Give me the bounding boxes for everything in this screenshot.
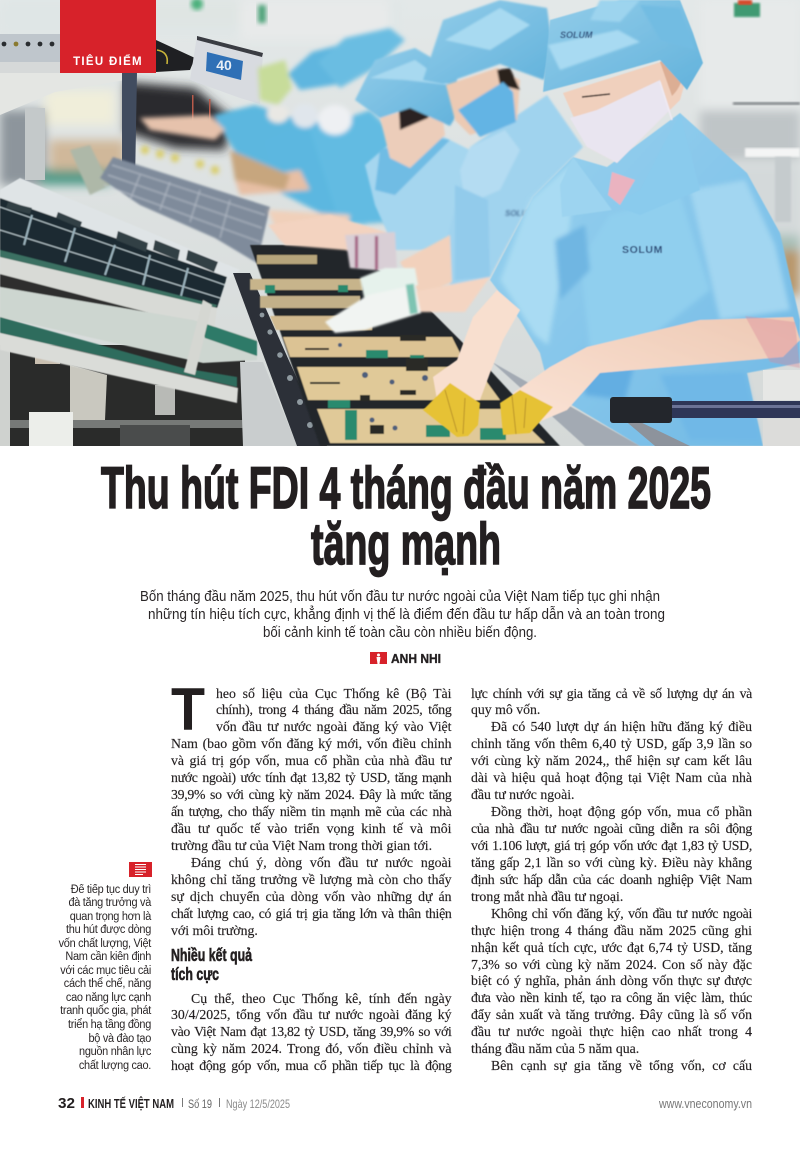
sidebar pull quote: vốn chất lượng, Việt [59, 938, 151, 950]
body column 1, upper text [170, 686, 452, 938]
third worker [268, 48, 470, 272]
body column 2: Đồng thời, hoạt động góp vốn, mua cổ phần [491, 804, 752, 819]
body column 2: đầu tư nước ngoài thực hiện cao nhất trong 4 [471, 1024, 752, 1039]
body column 1, upper text: Nam (bao gồm vốn đăng ký mới, vốn điều chỉnh [171, 736, 452, 751]
body column 1, upper text: chính), trong 4 tháng đầu năm 2025, tổng [216, 702, 452, 717]
foreground bar clamp [610, 370, 800, 446]
body column 1, upper text: heo số liệu của Cục Thống kê (Bộ Tài [216, 686, 452, 700]
collar [612, 113, 700, 215]
sidebar pull quote: tranh quốc gia, phát [60, 1005, 151, 1017]
section tag: TIÊU ĐIỂM [60, 0, 156, 73]
body column 1, upper text: nước ngoài) ước tính đạt 13,82 tỷ USD, tăng mạnh [171, 770, 452, 785]
sidebar pull quote [58, 884, 152, 1072]
body column 2: lực chính với sự gia tăng cả về số lượng dự án và [471, 686, 752, 700]
body column 2: Không chỉ vốn đăng ký, vốn đầu tư nước ngoài [491, 906, 752, 921]
sidebar pull quote: đà tăng trưởng và [68, 897, 151, 909]
lede paragraph: những tín hiệu tích cực, khẳng định vị thế là điểm đến đầu tư hấp dẫn và an toàn trong [148, 605, 665, 623]
subheading: Nhiều kết quả tích cực [170, 945, 252, 984]
yellow gloves [423, 383, 480, 437]
body column 1, lower text: Cụ thể, theo Cục Thống kê, tính đến ngày [191, 990, 452, 1006]
factory background [0, 0, 800, 446]
body column 2: Bên cạnh sự gia tăng về tổng vốn, cơ cấu [491, 1058, 752, 1073]
author byline [370, 651, 441, 666]
body column 2: tháng đầu năm của 5 năm qua. [471, 1041, 639, 1056]
sidebar pull quote: cách thể chế, năng [64, 978, 151, 990]
front tray [0, 178, 257, 403]
author byline: ANH NHI [391, 651, 441, 666]
body column 2: dài và hiệu quả hoạt động tại Việt Nam của nhà [471, 770, 752, 785]
body column 2: đẩy sản xuất và tăng trưởng. Đây cũng là số vốn [471, 1007, 752, 1022]
title [100, 456, 711, 578]
body column 2: tăng gấp 2,1 lần so với cùng kỳ. Điều này khẳng [471, 855, 752, 870]
body column 2: với 1.106 lượt, giá trị góp vốn ước đạt 1,83 tỷ USD, [471, 838, 752, 853]
body column 1, lower text: hoạt động góp vốn, mua cổ phần tiếp tục là động [171, 1058, 452, 1073]
lede paragraph: bối cảnh kinh tế toàn cầu còn nhiều biến động. [263, 624, 537, 641]
body column 1, upper text: vốn đầu tư nước ngoài đăng ký vào Việt [216, 719, 452, 734]
metal side rail [492, 362, 640, 446]
title: tăng mạnh [311, 512, 501, 577]
printed circuit boards [250, 245, 560, 446]
body column 2: của nhà đầu tư nước ngoài cũng diễn ra sôi động [471, 821, 752, 836]
sidebar pull quote: Để tiếp tục duy trì [71, 884, 151, 896]
body column 1, upper text: và giá trị góp vốn, mua cổ phần của nhà đầu tư [171, 753, 452, 768]
body column 1, upper text: 39,9% so với cùng kỳ năm 2024. Đây là mức tăng [171, 787, 452, 802]
body column 1, lower text: 30/4/2025, tổng vốn đầu tư nước ngoài đăng ký [171, 1007, 452, 1022]
second worker: SOLUM [505, 209, 534, 218]
pole [122, 73, 137, 182]
body column 2: với cùng kỳ năm 2024,, thể hiện sự cam kết lâu [471, 753, 752, 768]
white gloves [325, 268, 421, 333]
body column 1, upper text: với môi trường. [171, 923, 258, 938]
main worker [423, 0, 800, 446]
arms [513, 317, 800, 427]
body column 1, upper text: chất lượng cao, có giá trị gia tăng lớn và thân thiện [171, 906, 452, 921]
body column 1, lower text [170, 990, 452, 1074]
body column 1, upper text: không chỉ tăng trưởng về lượng mà còn cho thấy [171, 872, 452, 887]
body column 2: đầu tư nước ngoài. [471, 787, 574, 802]
sidebar pull quote: với các mục tiêu cải [60, 965, 151, 977]
body column 2: thực hiện trong 4 tháng đầu năm 2025 cũng ghi [471, 923, 752, 938]
conveyor belt rail [233, 273, 327, 446]
blurred distant workers [140, 28, 405, 245]
body column 1, lower text: cùng kỳ năm 2024. Trong đó, vốn điều chỉnh và [171, 1041, 452, 1056]
body column 2: nhận kết quả tích cực, ước đạt 6,74 tỷ USD, tăng [471, 940, 752, 955]
lede paragraph [140, 588, 665, 641]
sidebar pull quote: triển hạ tầng đồng [68, 1019, 151, 1031]
icon: red document [129, 862, 152, 877]
footer: page number and issue information: Số 19 [188, 1097, 212, 1111]
section tag: TIÊU ĐIỂM: TIÊU ĐIỂM [73, 56, 143, 68]
body column 1, lower text: vào Việt Nam đạt 13,82 tỷ USD, tăng 39,9% so với [171, 1024, 452, 1039]
dark lower machine area [0, 345, 245, 446]
main worker: SOLUM [560, 30, 593, 40]
body column 2: Đã có 540 lượt dự án hiện hữu đăng ký điều [491, 719, 752, 734]
body column 2: quy mô vốn. [471, 702, 540, 717]
subheading: Nhiều kết quả tích cực: tích cực [171, 964, 219, 984]
body column 2: định sức hấp dẫn của các doanh nghiệp Việt Nam [471, 872, 752, 887]
sidebar pull quote: bộ và đào tạo [88, 1033, 151, 1045]
second worker [400, 0, 583, 312]
face [563, 60, 688, 163]
body column 2: 7,3% so với cùng kỳ năm 2024. Con số này đặc [471, 956, 752, 972]
logo: SOLUM [622, 244, 663, 256]
body column 2: trong mắt nhà đầu tư ngoại. [471, 889, 623, 904]
sign with number 40 [190, 36, 263, 131]
body column 2: chỉnh tăng vốn thêm 6,40 tỷ USD, gấp 3,9 lần so [471, 736, 752, 751]
photo: factory workers on electronics assembly line [0, 0, 800, 446]
body column 1, upper text: sự dịch chuyển của dòng vốn vào những dự án [171, 889, 452, 904]
sidebar pull quote: cao năng lực cạnh [66, 992, 151, 1004]
hat [543, 0, 703, 92]
footer: page number and issue information [58, 1095, 290, 1112]
body column 2: biệt có ý nghĩa, phản ánh dòng vốn thực sự được [471, 973, 752, 988]
lede paragraph: Bốn tháng đầu năm 2025, thu hút vốn đầu tư nước ngoài của Việt Nam tiếp tục ghi nhận [140, 588, 660, 605]
footer: page number and issue information: 32 [58, 1095, 75, 1112]
sidebar pull quote: chất lượng cao. [79, 1060, 151, 1072]
back tray [70, 145, 270, 263]
body column 1, upper text: Đáng chú ý, dòng vốn đầu tư nước ngoài [191, 855, 452, 870]
sidebar pull quote: Nam cần kiên định [65, 951, 151, 963]
body column 1, upper text: ấn tượng, cho thấy niềm tin mạnh mẽ của các nhà [171, 804, 452, 819]
body column 1, upper text: đầu tư quốc tế vào triển vọng kinh tế và môi [171, 821, 452, 836]
footer: page number and issue information: KINH TẾ VIỆT NAM [88, 1096, 174, 1111]
shirt [490, 113, 800, 446]
body column 1, upper text: trường đầu tư của Việt Nam trong thời gian tới. [171, 838, 432, 853]
sidebar pull quote: thu hút được dòng [66, 924, 151, 936]
body column 2: đưa vào nền kinh tế, tạo ra công ăn việc làm, thúc [471, 990, 752, 1005]
sign with number 40: 40 [216, 57, 232, 73]
body column 2 [470, 686, 752, 1074]
sidebar pull quote: nguồn nhân lực [79, 1046, 151, 1058]
top-left machinery shelf [0, 34, 195, 180]
sidebar pull quote: quan trọng hơn là [70, 911, 151, 923]
